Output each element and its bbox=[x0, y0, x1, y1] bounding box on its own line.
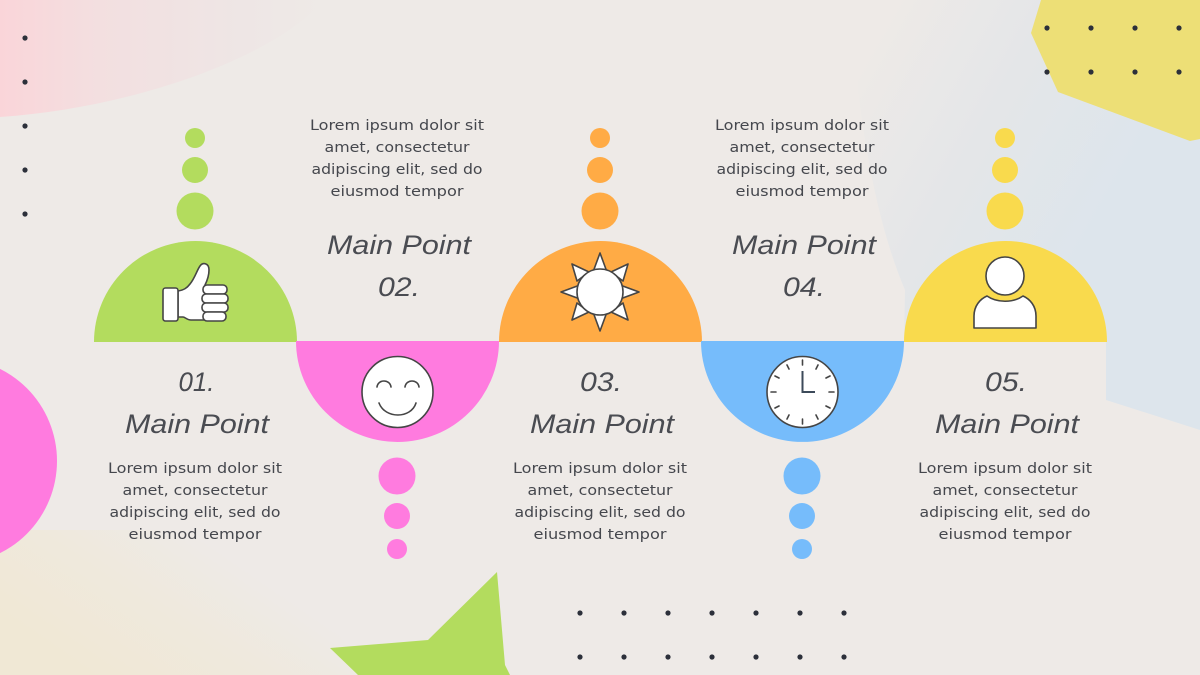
step 5 number: 05. bbox=[985, 367, 1027, 397]
dot grid: bottom bbox=[577, 610, 847, 660]
step 4 text: adipiscing elit, sed do bbox=[716, 162, 888, 178]
step 5 text: Lorem ipsum dolor sit bbox=[918, 461, 1092, 477]
step 2 dots bbox=[378, 458, 416, 559]
background shape: pink circle bbox=[0, 358, 57, 564]
step 4 heading: Main Point bbox=[732, 230, 878, 260]
step 2 heading: Main Point bbox=[327, 230, 473, 260]
step 5 text bbox=[918, 461, 1092, 543]
step 2 text: adipiscing elit, sed do bbox=[312, 162, 483, 178]
background blob: pink top left bbox=[0, 0, 325, 117]
icon: thumbs up bbox=[163, 264, 228, 321]
step 4 text: eiusmod tempor bbox=[736, 184, 869, 200]
step 3 text: amet, consectetur bbox=[528, 483, 673, 499]
step 2 text bbox=[310, 118, 484, 200]
step 2 semicircle bbox=[296, 341, 499, 442]
step 5 text: amet, consectetur bbox=[932, 483, 1078, 499]
step 1 semicircle bbox=[94, 241, 297, 342]
step 4 dots bbox=[784, 458, 820, 559]
step 3 text bbox=[513, 461, 687, 543]
step 4 number: 04. bbox=[783, 272, 825, 302]
background shape: green star bbox=[330, 572, 510, 675]
step 1 bbox=[94, 128, 297, 543]
step 3 dots bbox=[582, 128, 618, 230]
step 1 heading: Main Point bbox=[125, 409, 271, 439]
step 4 semicircle bbox=[701, 341, 904, 442]
background blob: blue right bbox=[850, 0, 1200, 430]
step 1 number: 01. bbox=[178, 367, 214, 397]
step 5 heading: Main Point bbox=[935, 409, 1081, 439]
step 2 number: 02. bbox=[378, 272, 420, 302]
step 1 text: eiusmod tempor bbox=[128, 527, 262, 543]
icon: person bbox=[974, 257, 1036, 328]
step 4 text: amet, consectetur bbox=[730, 140, 875, 156]
dot grid: top right bbox=[1044, 25, 1182, 75]
step 5 bbox=[904, 128, 1107, 543]
step 3 text: eiusmod tempor bbox=[534, 527, 667, 543]
step 1 dots bbox=[176, 128, 214, 230]
step 5 semicircle bbox=[904, 241, 1107, 342]
step 4 bbox=[701, 118, 904, 559]
step 1 text bbox=[108, 461, 282, 543]
step 2 bbox=[296, 118, 499, 559]
step 5 text: eiusmod tempor bbox=[938, 527, 1072, 543]
step 2 text: Lorem ipsum dolor sit bbox=[310, 118, 484, 134]
step 3 text: Lorem ipsum dolor sit bbox=[513, 461, 687, 477]
dot grid: left bbox=[22, 35, 28, 217]
icon: smiley bbox=[362, 356, 433, 428]
step 3 number: 03. bbox=[580, 367, 622, 397]
step 3 bbox=[499, 128, 702, 543]
step 5 dots bbox=[986, 128, 1024, 230]
step 4 text: Lorem ipsum dolor sit bbox=[715, 118, 889, 134]
icon: sun bbox=[561, 253, 639, 331]
step 3 text: adipiscing elit, sed do bbox=[514, 505, 686, 521]
step 3 semicircle bbox=[499, 241, 702, 342]
background blob: cream bottom left bbox=[0, 530, 365, 675]
background shape: yellow top right bbox=[1031, 0, 1200, 141]
step 1 text: Lorem ipsum dolor sit bbox=[108, 461, 282, 477]
icon: clock bbox=[767, 356, 838, 428]
step 2 text: amet, consectetur bbox=[324, 140, 470, 156]
step 4 text bbox=[715, 118, 889, 200]
step 5 text: adipiscing elit, sed do bbox=[920, 505, 1091, 521]
step 2 text: eiusmod tempor bbox=[330, 184, 464, 200]
step 3 heading: Main Point bbox=[530, 409, 676, 439]
step 1 text: adipiscing elit, sed do bbox=[110, 505, 281, 521]
step 1 text: amet, consectetur bbox=[122, 483, 268, 499]
